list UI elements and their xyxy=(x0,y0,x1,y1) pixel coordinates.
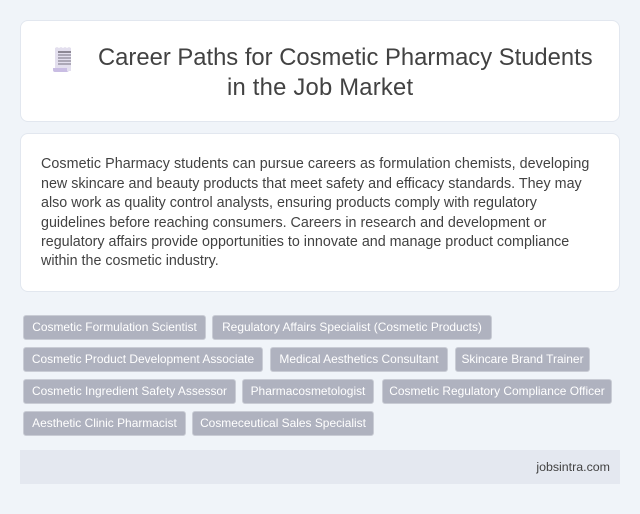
footer source text: jobsintra.com xyxy=(536,460,610,474)
tag xyxy=(23,411,186,436)
description text: within the cosmetic industry. xyxy=(41,253,219,269)
description text: Cosmetic Pharmacy students can pursue careers as formulation chemists, developing xyxy=(41,156,589,172)
description text: guidelines before reaching consumers. Careers in research and development or xyxy=(41,215,546,231)
description text: also work as quality control analysts, ensuring products comply with regulatory xyxy=(41,195,537,211)
career tags xyxy=(23,315,612,436)
description text xyxy=(41,156,589,269)
tag xyxy=(270,347,448,372)
tag xyxy=(382,379,612,404)
title xyxy=(98,44,593,101)
icon: document xyxy=(53,47,71,72)
tag: Cosmetic Product Development Associate xyxy=(32,352,254,366)
title: Career Paths for Cosmetic Pharmacy Students xyxy=(98,44,593,71)
title: in the Job Market xyxy=(227,74,413,101)
tag xyxy=(242,379,374,404)
tag xyxy=(192,411,374,436)
tag: Aesthetic Clinic Pharmacist xyxy=(32,416,177,430)
footer bar xyxy=(20,450,620,484)
tag: Regulatory Affairs Specialist (Cosmetic Products) xyxy=(222,320,482,334)
tag xyxy=(23,315,206,340)
tag: Cosmetic Ingredient Safety Assessor xyxy=(32,384,227,398)
tag: Pharmacosmetologist xyxy=(251,384,365,398)
tag xyxy=(212,315,492,340)
header panel xyxy=(20,20,620,122)
tag: Medical Aesthetics Consultant xyxy=(279,352,439,366)
tag: Cosmeceutical Sales Specialist xyxy=(200,416,366,430)
tag: Cosmetic Regulatory Compliance Officer xyxy=(389,384,605,398)
tag xyxy=(23,347,263,372)
description text: regulatory affairs provide opportunities to innovate and manage product compliance xyxy=(41,234,569,250)
tag: Skincare Brand Trainer xyxy=(461,352,584,366)
tag: Cosmetic Formulation Scientist xyxy=(32,320,197,334)
description text: new skincare and beauty products that meet safety and efficacy standards. They may xyxy=(41,176,582,192)
tag xyxy=(23,379,236,404)
tag xyxy=(455,347,590,372)
description panel xyxy=(20,133,620,292)
